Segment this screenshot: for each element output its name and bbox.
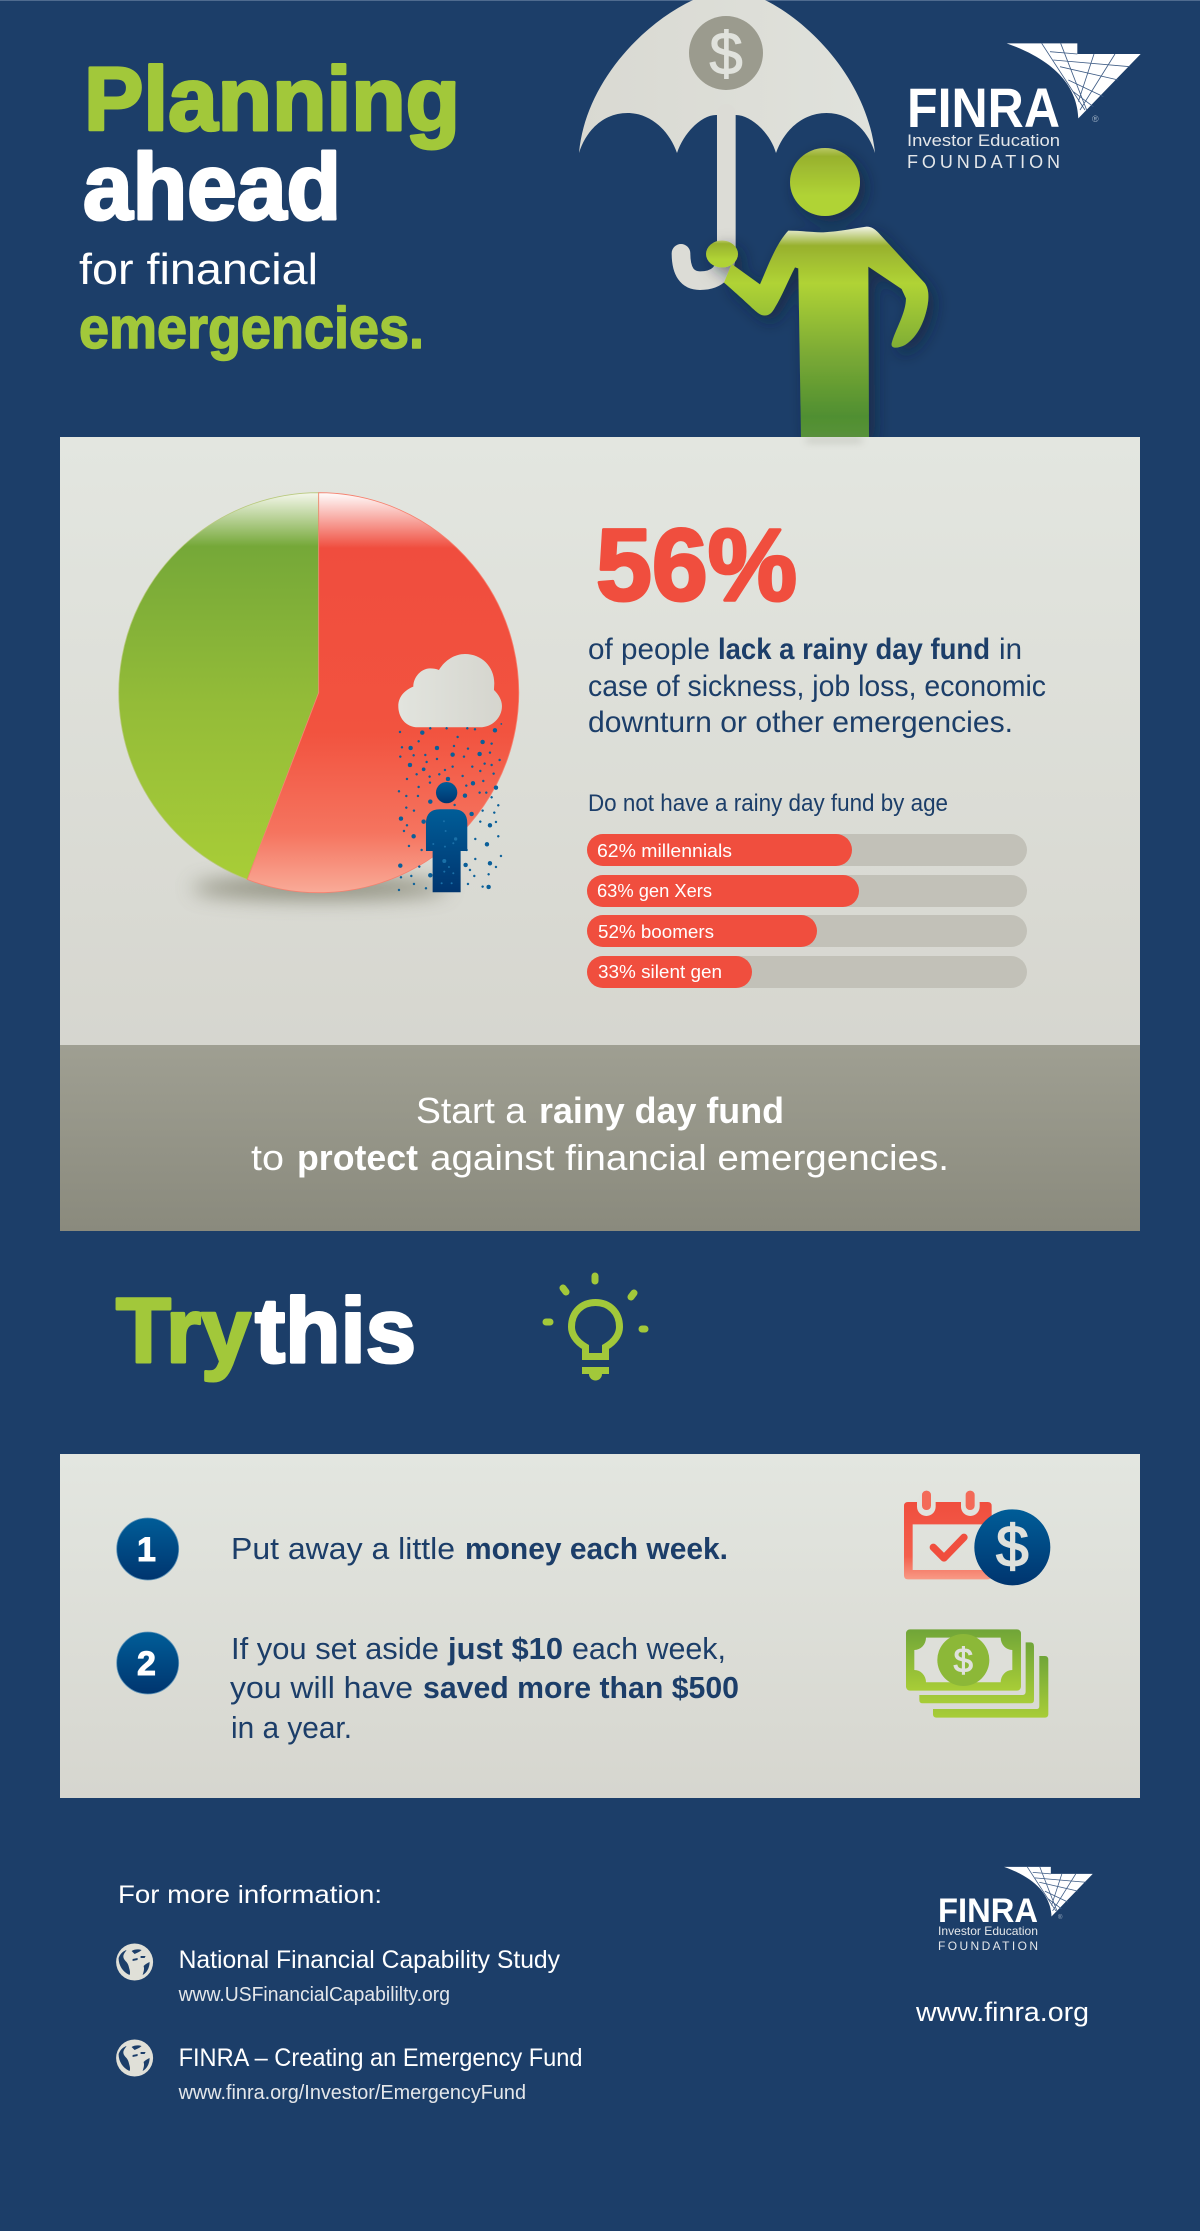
icon: umbrella with dollar sign [579, 0, 875, 281]
icon: green person holding umbrella [706, 148, 928, 437]
icon: globe [116, 1944, 153, 1980]
panel: call to action band: against financial emergencies. [430, 1137, 949, 1178]
tip text 2: each week, [572, 1631, 726, 1666]
heading: Try this [116, 1280, 416, 1382]
logo: FINRA footer [938, 1867, 1093, 1953]
number badge 1: 1 [137, 1531, 156, 1569]
icon: light bulb [546, 1276, 645, 1381]
text block: lack a rainy day fund: downturn or other emergencies. [588, 706, 1013, 739]
heading: Try this: Try [116, 1280, 251, 1382]
tip text 2: If you set aside [231, 1631, 439, 1666]
bar: gen Xers 63%: 63% gen Xers [597, 881, 712, 901]
icon: FINRA mesh triangle [1007, 43, 1141, 118]
number badge 1 [117, 1518, 179, 1580]
bar: millennials 62% [587, 834, 1027, 866]
title [79, 50, 460, 361]
logo: FINRA footer: Investor Education [938, 1924, 1038, 1938]
tip text 2: you will have [230, 1670, 413, 1705]
tip 2 [117, 1631, 739, 1745]
logo: FINRA Investor Education Foundation: ® [1092, 114, 1099, 124]
icon: umbrella with dollar sign: $ [709, 20, 743, 87]
logo: FINRA Investor Education Foundation: FOUNDATION [907, 152, 1060, 172]
icon: FINRA mesh triangle small [1004, 1867, 1093, 1916]
logo: FINRA Investor Education Foundation: FINRA [907, 76, 1060, 139]
panel: call to action band: protect [297, 1137, 418, 1178]
title: Planning [84, 50, 460, 150]
resource: FINRA Creating an Emergency Fund [116, 2040, 582, 2104]
logo: FINRA Investor Education Foundation: Investor Education [907, 131, 1060, 150]
bar: gen Xers 63% [587, 875, 1027, 907]
resource: National Financial Capability Study: National Financial Capability Study [179, 1946, 560, 1974]
logo: FINRA footer: ® [1058, 1914, 1063, 1921]
panel: rainy day fund statistic [60, 437, 1140, 1047]
text block: lack a rainy day fund: lack a rainy day fund [718, 633, 990, 666]
icon: calendar with dollar coin: $ [996, 1514, 1029, 1579]
icon: stack of dollar bills: $ [954, 1642, 973, 1680]
pie chart: 56 percent lack a rainy day fund [119, 493, 519, 899]
panel: call to action band [60, 1045, 1140, 1231]
panel: call to action band: Start a [416, 1090, 527, 1131]
icon: person under rain cloud [398, 654, 502, 892]
resource: FINRA Creating an Emergency Fund: FINRA – Creating an Emergency Fund [179, 2044, 582, 2072]
panel: call to action band: rainy day fund [539, 1090, 784, 1131]
logo: FINRA footer: FOUNDATION [938, 1939, 1038, 1953]
chart heading: Do not have a rainy day fund by age [588, 790, 948, 817]
tip 1 [117, 1518, 728, 1580]
bar: boomers 52%: 52% boomers [598, 922, 714, 942]
tip text 2 [230, 1631, 739, 1745]
text block: lack a rainy day fund [588, 633, 1046, 739]
heading: Try this: this [255, 1280, 416, 1382]
icon: stack of dollar bills [906, 1629, 1048, 1718]
text block: lack a rainy day fund: case of sickness, job loss, economic [588, 670, 1046, 703]
bar: boomers 52% [587, 915, 1027, 947]
tip text 2: just $10 [447, 1631, 563, 1666]
resource: National Financial Capability Study: www.USFinancialCapabililty.org [178, 1984, 450, 2006]
title: emergencies. [79, 296, 424, 361]
logo: FINRA footer: FINRA [938, 1892, 1038, 1930]
bar: silent gen 33%: 33% silent gen [598, 962, 722, 982]
bar: silent gen 33% [587, 956, 1027, 988]
bar: millennials 62%: 62% millennials [597, 841, 732, 861]
tip text 1: Put away a little [231, 1531, 455, 1566]
tip text 1: money each week. [465, 1531, 728, 1566]
tip text 2: saved more than $500 [423, 1670, 739, 1705]
footer heading: For more information: [118, 1881, 382, 1909]
logo: FINRA Investor Education Foundation [907, 43, 1141, 172]
number badge 2 [117, 1632, 179, 1694]
panel: call to action band: to [251, 1137, 284, 1178]
text block: lack a rainy day fund: in [999, 633, 1022, 666]
icon: globe [116, 2040, 153, 2076]
icon: calendar with dollar coin [904, 1491, 1050, 1585]
tip text 2: in a year. [231, 1710, 352, 1745]
footer: more information [116, 1881, 582, 2104]
big number: 56%: 56% [596, 508, 797, 622]
panel: tips [60, 1454, 1140, 1798]
footer link: www.finra.org: www.finra.org [915, 1997, 1089, 2027]
number badge 2: 2 [137, 1645, 156, 1683]
resource: National Financial Capability Study [116, 1944, 560, 2006]
resource: FINRA Creating an Emergency Fund: www.finra.org/Investor/EmergencyFund [178, 2082, 526, 2104]
bar chart: no rainy day fund by age [587, 790, 1027, 988]
title: for financial [79, 245, 318, 294]
text block: lack a rainy day fund: of people [588, 633, 710, 666]
title: ahead [83, 134, 341, 239]
tip text 1 [231, 1531, 728, 1566]
